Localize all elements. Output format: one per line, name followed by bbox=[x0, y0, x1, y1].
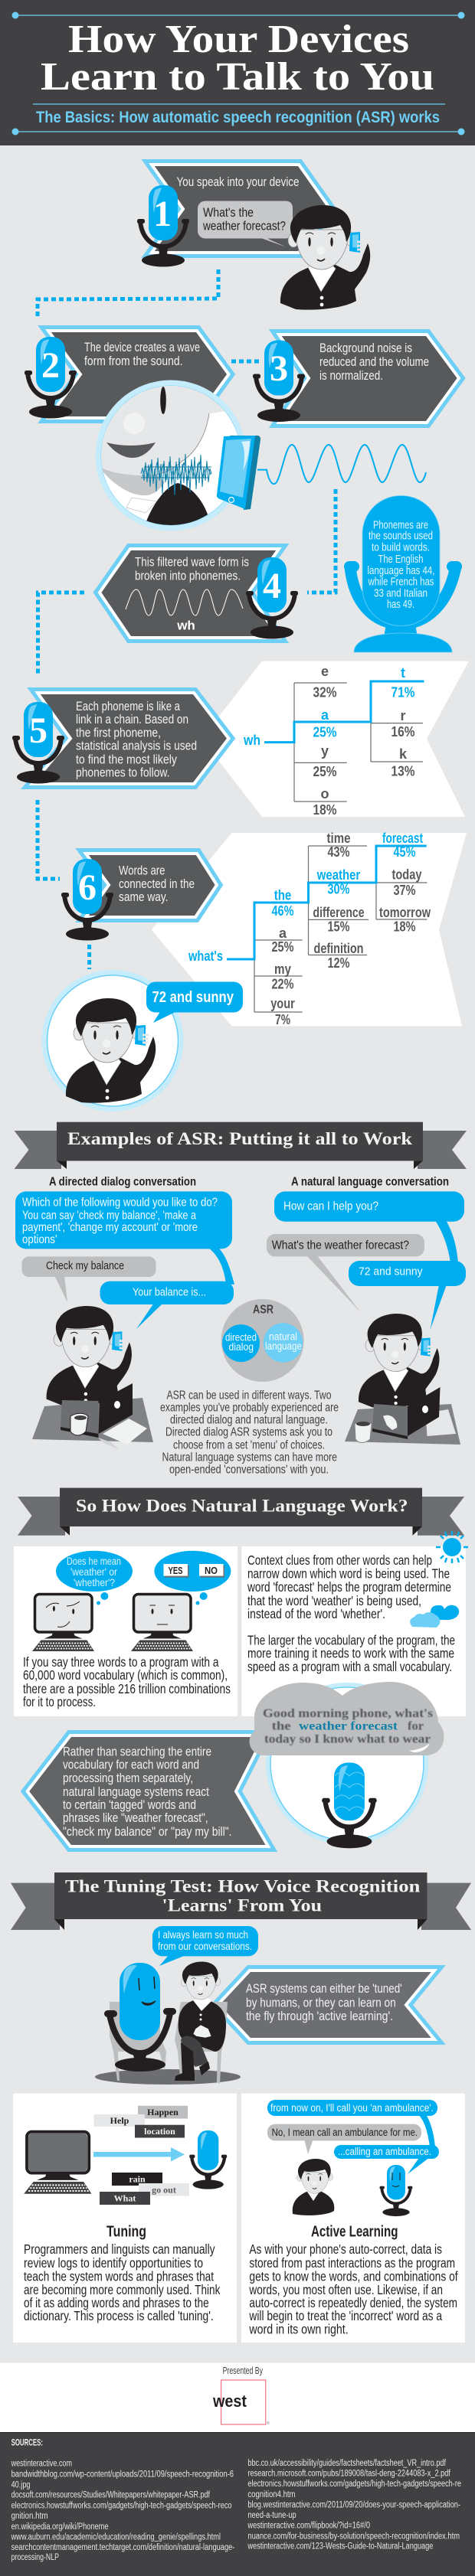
connector: step 6 to answer bbox=[87, 945, 91, 969]
speech bubble: forecast question: weather forecast? bbox=[202, 219, 286, 233]
active learning heading: Active Learning bbox=[311, 2223, 398, 2240]
step 8 text: ASR systems can either be 'tuned' bbox=[246, 1981, 402, 1996]
vocabulary text bbox=[23, 1654, 231, 1709]
word tags: Help bbox=[110, 2115, 129, 2126]
thought cloud: Good morning phone, what's bbox=[263, 1707, 433, 1720]
sources panel: SOURCES: bbox=[11, 2439, 43, 2448]
connector: step 5 to step 6 bbox=[38, 800, 60, 879]
ASR paragraph: examples you've probably experienced are bbox=[160, 1402, 339, 1415]
sad person bbox=[293, 2159, 334, 2215]
directed dialog circle: dialog bbox=[228, 1341, 254, 1353]
presented by footer: Presented By bbox=[223, 2365, 263, 2376]
sources left column: bandwidthblog.com/wp-content/uploads/2011/09/speech-recognition-6 bbox=[11, 2470, 234, 2479]
speech bubble: forecast question: What's the bbox=[203, 205, 254, 220]
word tree panel: 37% bbox=[394, 883, 415, 898]
close-up circle with wave form bbox=[92, 375, 253, 528]
active learning bubbles: ...calling an ambulance. bbox=[338, 2146, 431, 2157]
step 6 text bbox=[119, 864, 195, 904]
step 7 panel bbox=[28, 1735, 268, 1846]
left desk scene bbox=[32, 1306, 153, 1449]
sources left column bbox=[11, 2460, 235, 2562]
step 2 text: The device creates a wave bbox=[84, 340, 200, 354]
sources left column: 40.jpg bbox=[11, 2480, 31, 2489]
icon: microphone 4 bbox=[246, 557, 298, 638]
natural language circle: language bbox=[265, 1340, 302, 1352]
sources left column: en.wikipedia.org/wiki/Phoneme bbox=[11, 2522, 109, 2532]
icon: microphone bbox=[189, 2130, 227, 2189]
directed dialog bubbles: You can say 'check my balance', 'make a bbox=[22, 1210, 196, 1222]
word tree panel: time bbox=[326, 831, 351, 846]
step 6 panel bbox=[61, 854, 217, 940]
person with phone bbox=[280, 205, 370, 310]
phoneme tree panel: 13% bbox=[391, 764, 415, 779]
banner: natural language bbox=[18, 1488, 464, 1536]
step 8 panel bbox=[218, 1970, 434, 2039]
icon: microphone 4: 4 bbox=[263, 566, 281, 606]
ASR paragraph bbox=[160, 1389, 339, 1476]
speech bubble: forecast question bbox=[198, 201, 293, 246]
natural language bubbles: 72 and sunny bbox=[359, 1265, 423, 1278]
phoneme fact text: Phonemes are bbox=[373, 519, 428, 531]
step 2 text: form from the sound. bbox=[84, 354, 182, 368]
step 4 panel bbox=[100, 549, 298, 638]
step 7 text: phrases like "weather forecast", bbox=[63, 1810, 208, 1825]
small microphone character bbox=[380, 2165, 412, 2216]
word tags: rain bbox=[129, 2174, 146, 2185]
panel: tuning bbox=[13, 2094, 237, 2343]
step 6 text: Words are bbox=[119, 864, 165, 877]
directed dialog circle: directed bbox=[225, 1331, 257, 1343]
word tree panel: 7% bbox=[275, 1012, 290, 1027]
phoneme tree panel: wh bbox=[243, 733, 260, 748]
word tree panel: 22% bbox=[271, 976, 294, 991]
step 5 text: link in a chain. Based on bbox=[76, 712, 188, 726]
wave line from phone bbox=[257, 445, 426, 484]
ASR paragraph: choose from a set 'menu' of choices. bbox=[173, 1439, 325, 1451]
sources left column: www.auburn.edu/academic/education/reading_genie/spellings.html bbox=[11, 2532, 221, 2542]
banner: tuning test: The Tuning Test: How Voice Recognition bbox=[65, 1876, 421, 1895]
thought cloud: today so I know what to wear bbox=[264, 1732, 431, 1745]
thought cloud: weather forecast bbox=[299, 1720, 398, 1733]
phoneme fact microphone bbox=[344, 496, 462, 652]
thought bubble: yes no: NO bbox=[205, 1565, 218, 1576]
icon: clouds bbox=[410, 1605, 459, 1628]
phoneme tree panel: o bbox=[320, 786, 329, 802]
vocabulary text: 60,000 word vocabulary (which is common), bbox=[23, 1667, 228, 1683]
directed dialog circle bbox=[222, 1324, 260, 1362]
sources right column: westinteractive.com/123-Wests-Guide-to-Natural-Language bbox=[247, 2542, 433, 2552]
sources left column: gnition.htm bbox=[11, 2512, 48, 2521]
directed dialog bubbles: Your balance is... bbox=[133, 1286, 206, 1298]
icon: tagged microphone bbox=[322, 1762, 377, 1848]
seated person bbox=[175, 1961, 226, 2081]
banner: tuning test bbox=[11, 1872, 471, 1930]
arrow bbox=[93, 2147, 185, 2162]
banner: examples of ASR bbox=[15, 1122, 467, 1169]
ASR venn diagram bbox=[221, 1299, 304, 1382]
phoneme fact text: The English bbox=[378, 553, 423, 566]
icon: phone bbox=[217, 436, 260, 510]
word tree panel: the bbox=[274, 887, 291, 903]
step 7 text: to certain 'tagged' words and bbox=[63, 1797, 196, 1812]
phoneme fact text: language has 44, bbox=[368, 565, 435, 577]
speech bubble: always learning: I always learn so much bbox=[158, 1928, 248, 1941]
word tree panel: weather bbox=[316, 867, 360, 883]
ASR paragraph: Natural language systems can have more bbox=[162, 1451, 337, 1464]
step 5 text: Each phoneme is like a bbox=[76, 699, 180, 713]
tuning text: teach the system words and phrases that bbox=[24, 2269, 214, 2284]
word tree panel: 30% bbox=[328, 882, 349, 897]
context text: that the word 'weather' is being used, bbox=[247, 1593, 421, 1608]
connector: wave to step 4 bbox=[307, 489, 336, 593]
noisy wave form bbox=[141, 454, 211, 495]
header panel bbox=[0, 0, 475, 145]
phoneme tree panel: r bbox=[400, 708, 406, 723]
sources right column: westinteractive.com/flipbook/?id=16#/0 bbox=[247, 2522, 370, 2531]
vocabulary text: for it to process. bbox=[23, 1694, 96, 1709]
phoneme tree panel: 25% bbox=[313, 764, 337, 779]
answer circle with person bbox=[44, 972, 243, 1108]
icon: microphone 5: 5 bbox=[29, 710, 48, 751]
presented by footer bbox=[0, 2362, 475, 2432]
phoneme tree panel: k bbox=[399, 746, 408, 762]
word tree panel bbox=[152, 831, 467, 1027]
sources left column: electronics.howstuffworks.com/gadgets/high-tech-gadgets/speech-reco bbox=[11, 2501, 231, 2510]
phoneme label: wh bbox=[176, 619, 195, 632]
step 1 panel bbox=[137, 165, 370, 310]
step 5 text: phonemes to follow. bbox=[76, 766, 170, 780]
phoneme tree panel: 16% bbox=[391, 724, 415, 739]
speech bubble: 72 and sunny bbox=[146, 981, 243, 1023]
thought bubble: confused: Does he mean bbox=[67, 1556, 121, 1567]
word tree panel: definition bbox=[314, 941, 363, 956]
thought cloud: for bbox=[408, 1720, 424, 1733]
phoneme tree panel: t bbox=[401, 665, 405, 681]
icon: microphone 3 bbox=[253, 340, 305, 422]
active learning bubbles: No, I mean call an ambulance for me. bbox=[272, 2127, 418, 2138]
step 3 text bbox=[319, 341, 429, 383]
title: How Your Devices bbox=[68, 18, 409, 61]
active learning text: word in its own right. bbox=[249, 2322, 349, 2337]
ASR paragraph: directed dialog and natural language. bbox=[170, 1414, 328, 1427]
directed dialog bubbles bbox=[15, 1191, 234, 1329]
icon: microphone 2 bbox=[25, 337, 77, 418]
banner: natural language: So How Does Natural Language Work? bbox=[76, 1497, 408, 1516]
sources right column: cognition4.htm bbox=[247, 2490, 296, 2499]
panel: vocabulary bbox=[14, 1546, 238, 1716]
speech bubble: always learning: from our conversations. bbox=[158, 1940, 252, 1952]
tuning text: are becoming more commonly used. Think bbox=[24, 2282, 221, 2297]
word tree panel: 45% bbox=[394, 844, 415, 860]
step 5 text: to find the most likely bbox=[76, 752, 177, 767]
thought bubble: yes no: YES bbox=[169, 1565, 183, 1576]
icon: computer bbox=[24, 2132, 91, 2194]
word tree panel: 46% bbox=[271, 903, 294, 919]
banner: examples of ASR: Examples of ASR: Putting it all to Work bbox=[67, 1129, 412, 1148]
thought bubble: confused: 'whether'? bbox=[74, 1577, 115, 1588]
step 7 text: processing them separately, bbox=[63, 1771, 193, 1785]
icon: microphone 1 bbox=[137, 185, 189, 266]
phoneme tree panel: a bbox=[321, 707, 329, 723]
word tree panel: 43% bbox=[328, 844, 349, 860]
sources left column: searchcontentmanagement.techtarget.com/definition/natural-language- bbox=[11, 2543, 235, 2552]
word tree panel: 12% bbox=[328, 955, 349, 971]
step 2 text bbox=[84, 340, 200, 368]
sources left column: docsoft.com/resources/Studies/Whitepapers/whitepaper-ASR.pdf bbox=[11, 2491, 211, 2500]
sources right column bbox=[247, 2459, 461, 2552]
natural language circle: natural bbox=[269, 1331, 297, 1343]
step 7 text bbox=[63, 1745, 231, 1839]
step 6 text: same way. bbox=[119, 890, 169, 904]
phoneme tree panel: 71% bbox=[391, 685, 415, 700]
sources right column: need-a-tune-up bbox=[247, 2511, 296, 2520]
active learning bubbles bbox=[267, 2100, 439, 2174]
phoneme fact text: 33 and Italian bbox=[374, 588, 428, 600]
sources left column: westinteractive.com bbox=[11, 2460, 72, 2469]
title: Learn to Talk to You bbox=[41, 55, 434, 99]
phoneme fact text: has 49. bbox=[387, 599, 414, 611]
word tree panel: 25% bbox=[271, 939, 294, 955]
step 5 text: the first phoneme, bbox=[76, 726, 161, 739]
step 7 text: vocabulary for each word and bbox=[63, 1758, 199, 1772]
logo: west bbox=[212, 2392, 247, 2411]
sources panel bbox=[0, 2432, 475, 2576]
directed dialog bubbles: payment', 'change my account' or 'more bbox=[22, 1221, 198, 1234]
step 8 text: the fly through 'active learning'. bbox=[246, 2009, 393, 2023]
icon: microphone 3: 3 bbox=[270, 348, 288, 389]
step 3 text: is normalized. bbox=[319, 368, 383, 383]
icon: big microphone character bbox=[104, 1963, 176, 2072]
word tree panel: my bbox=[274, 962, 291, 977]
icon: microphone 6: 6 bbox=[78, 867, 97, 908]
natural language bubbles: What's the weather forecast? bbox=[272, 1239, 409, 1252]
ASR paragraph: Directed dialog ASR systems ask you to bbox=[165, 1426, 332, 1439]
phoneme fact text: the sounds used bbox=[369, 531, 433, 543]
icon: microphone 6 bbox=[61, 859, 113, 940]
step 4 text bbox=[135, 555, 249, 583]
phoneme tree panel: 25% bbox=[313, 724, 337, 739]
connector: step 2 to step 3 bbox=[231, 360, 260, 363]
word tags: location bbox=[144, 2126, 175, 2137]
step 4 text: broken into phonemes. bbox=[135, 568, 241, 583]
step 5 text bbox=[76, 699, 197, 780]
icon: neutral computer bbox=[131, 1594, 193, 1651]
ASR paragraph: ASR can be used in different ways. Two bbox=[167, 1389, 331, 1402]
phoneme tree panel: e bbox=[321, 664, 329, 679]
context text bbox=[247, 1552, 455, 1674]
step 7 text: natural language systems react bbox=[63, 1784, 209, 1799]
tuning text: Programmers and linguists can manually bbox=[24, 2241, 215, 2257]
step 2 panel bbox=[25, 331, 228, 418]
thought bubble: confused: 'weather' or bbox=[70, 1566, 117, 1578]
directed dialog bubbles: Which of the following would you like to do? bbox=[22, 1196, 218, 1209]
icon: microphone 2: 2 bbox=[41, 345, 60, 386]
icon: microphone 5 bbox=[12, 702, 64, 784]
phoneme fact text: to build words. bbox=[372, 542, 430, 554]
speech bubble: always learning bbox=[152, 1926, 258, 1966]
icon: confused computer bbox=[32, 1594, 94, 1651]
directed dialog bubbles: options' bbox=[22, 1233, 57, 1246]
phoneme fact text bbox=[368, 519, 435, 611]
word tags: What bbox=[114, 2192, 136, 2203]
tuning text: of it as adding words and phrases to the bbox=[24, 2295, 209, 2310]
word tags: Happen bbox=[147, 2107, 179, 2117]
active learning bubbles: from now on, I'll call you 'an ambulance'. bbox=[270, 2102, 434, 2114]
heading: directed dialog: A directed dialog conversation bbox=[49, 1176, 196, 1189]
step 6 text: connected in the bbox=[119, 877, 195, 891]
logo bbox=[212, 2380, 270, 2426]
panel: active learning bbox=[241, 2094, 465, 2343]
speech bubble: 72 and sunny: 72 and sunny bbox=[152, 989, 234, 1006]
word tree panel: today bbox=[392, 867, 421, 883]
step 3 text: Background noise is bbox=[319, 341, 412, 355]
tuning text bbox=[24, 2241, 221, 2323]
phoneme fact text: while French has bbox=[368, 576, 434, 589]
banner: tuning test: 'Learns' From You bbox=[162, 1895, 322, 1915]
thought bubble: yes no bbox=[154, 1551, 231, 1605]
natural language bubbles: How can I help you? bbox=[283, 1200, 378, 1213]
tuning text: review logs to identify opportunities to bbox=[24, 2255, 203, 2271]
phoneme tree panel: 18% bbox=[313, 802, 337, 818]
word tree panel: forecast bbox=[382, 831, 423, 846]
thought cloud: the bbox=[272, 1720, 291, 1733]
phoneme tree panel bbox=[201, 661, 469, 818]
step 5 text: statistical analysis is used bbox=[76, 739, 197, 753]
sources left column: processing-NLP bbox=[11, 2553, 59, 2562]
icon: sun bbox=[436, 1531, 468, 1563]
thought cloud bbox=[250, 1682, 444, 1755]
connector: step 1 to step 2 bbox=[38, 269, 218, 316]
word tree panel: 15% bbox=[328, 919, 349, 934]
tuning text: dictionary. This process is called 'tuning'. bbox=[24, 2308, 214, 2323]
step 3 panel bbox=[253, 335, 459, 423]
panel: context clues bbox=[242, 1531, 468, 1716]
word tree panel: difference bbox=[313, 905, 365, 920]
natural language bubbles bbox=[267, 1191, 466, 1330]
step 3 text: reduced and the volume bbox=[319, 354, 429, 369]
phoneme tree panel: 32% bbox=[313, 685, 337, 700]
word tags bbox=[93, 2106, 189, 2205]
context text: instead of the word 'whether'. bbox=[247, 1606, 385, 1621]
word tree panel: your bbox=[270, 996, 295, 1011]
ASR paragraph: open-ended 'conversations' with you. bbox=[169, 1463, 329, 1476]
step 4 text: This filtered wave form is bbox=[135, 555, 249, 570]
thought bubble: confused bbox=[56, 1551, 133, 1605]
word tree panel: a bbox=[279, 926, 287, 941]
vocabulary text: If you say three words to a program with a bbox=[23, 1654, 219, 1670]
active learning text bbox=[249, 2241, 458, 2337]
step 7 text: "check my balance" or "pay my bill". bbox=[63, 1824, 231, 1839]
step 8 text bbox=[246, 1981, 402, 2023]
step 8 text: by humans, or they can learn on bbox=[246, 1995, 396, 2010]
word tree panel: tomorrow bbox=[379, 905, 431, 920]
icon: microphone 1: 1 bbox=[153, 194, 172, 234]
chairs bbox=[110, 2002, 228, 2084]
word tree panel: 18% bbox=[394, 919, 415, 934]
tuning heading: Tuning bbox=[106, 2223, 146, 2240]
step 5 panel bbox=[12, 693, 228, 784]
step 1 text: You speak into your device bbox=[176, 175, 299, 189]
vocabulary text: there are a possible 216 trillion combinations bbox=[23, 1681, 231, 1696]
phoneme tree panel: y bbox=[321, 743, 329, 759]
right desk scene bbox=[345, 1314, 460, 1445]
natural language circle bbox=[264, 1323, 303, 1363]
connector: step 4 to step 5 bbox=[38, 593, 84, 676]
word tree panel: what's bbox=[188, 948, 223, 964]
title bbox=[41, 18, 434, 99]
seated scene: microphone and person bbox=[95, 1926, 258, 2085]
white wave bbox=[126, 589, 243, 615]
word tags: go out bbox=[152, 2185, 176, 2196]
mic circle with cloud bbox=[250, 1682, 444, 1848]
logo: ® bbox=[267, 2421, 270, 2426]
ASR venn diagram: ASR bbox=[253, 1304, 274, 1317]
directed dialog bubbles: Check my balance bbox=[46, 1260, 124, 1272]
step 7 text: Rather than searching the entire bbox=[63, 1745, 211, 1759]
